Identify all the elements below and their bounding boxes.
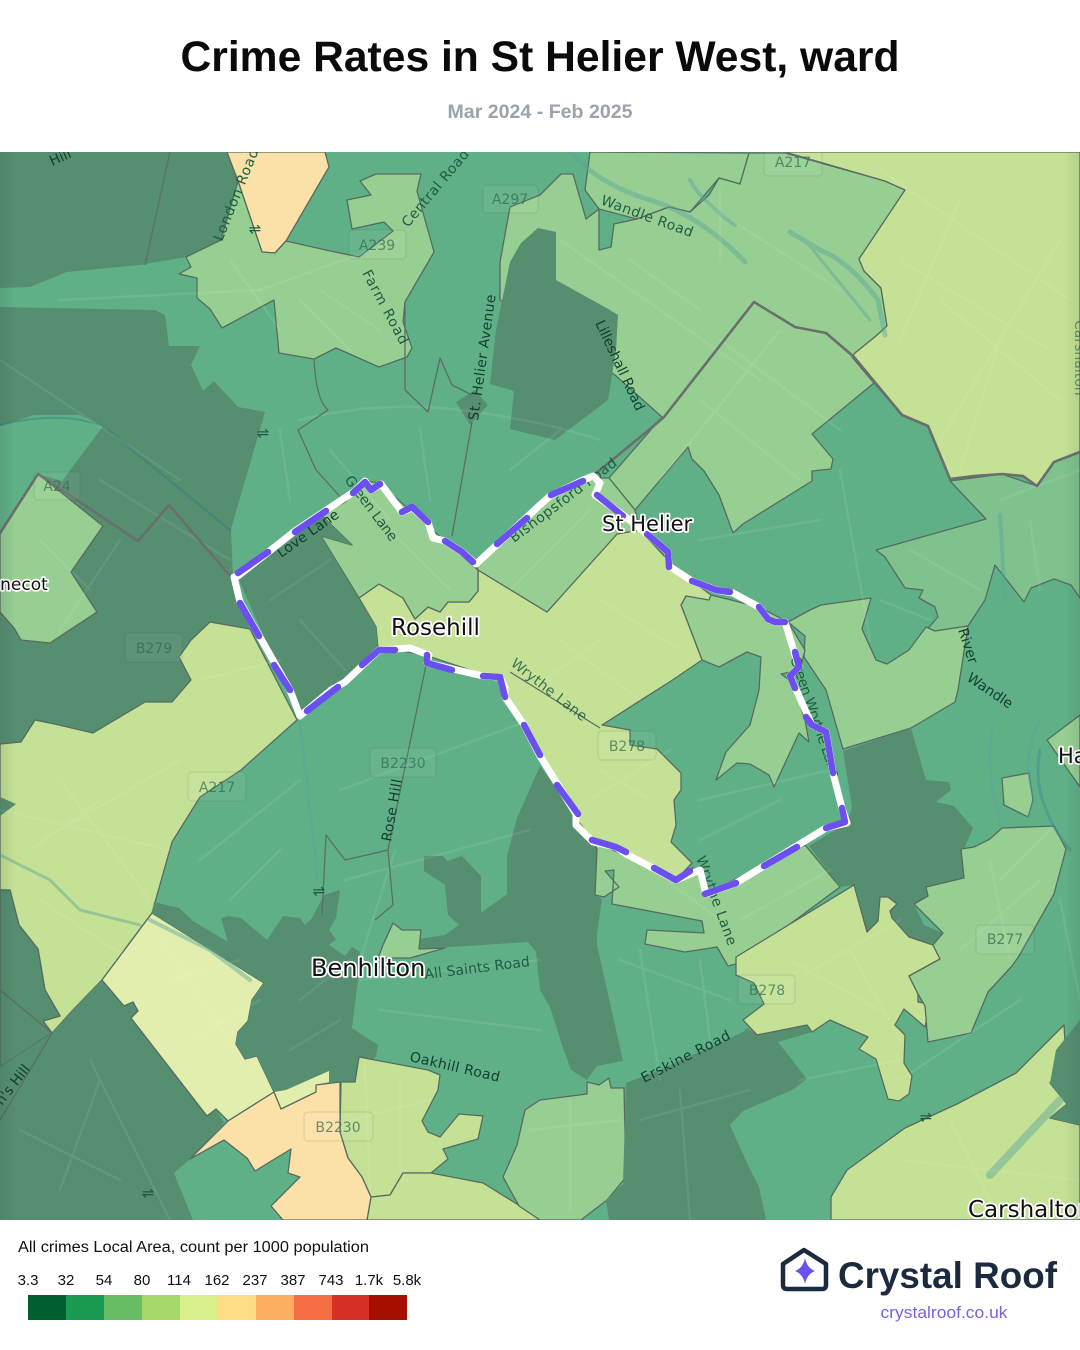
legend scale labels: 5.8k bbox=[393, 1272, 422, 1289]
road labels: St. Helier Avenue bbox=[466, 294, 500, 422]
legend title: All crimes Local Area, count per 1000 population bbox=[18, 1239, 369, 1256]
road labels: Hill bbox=[47, 146, 74, 170]
road labels: Wandle Road bbox=[599, 193, 695, 241]
road labels: Bishopsford Road bbox=[507, 455, 620, 546]
road labels: Green Wrythe Lane bbox=[786, 654, 843, 780]
road shields: B278 bbox=[609, 739, 645, 755]
legend scale labels bbox=[18, 1272, 422, 1289]
road labels: Rose Hill bbox=[379, 778, 406, 843]
rivers bbox=[0, 152, 1070, 1175]
road shields: B2230 bbox=[380, 756, 426, 772]
road shields: B277 bbox=[987, 932, 1023, 948]
road shields: A297 bbox=[492, 192, 528, 208]
legend bbox=[18, 1239, 422, 1320]
road shields bbox=[34, 150, 1034, 1141]
icon: house with star bbox=[783, 1250, 826, 1289]
map edge shading bbox=[0, 152, 1080, 1220]
title: Crime Rates in St Helier West, ward bbox=[180, 33, 900, 81]
road labels bbox=[0, 146, 1080, 1108]
road labels: Wrythe Lane bbox=[508, 656, 590, 725]
road labels: Wandle bbox=[964, 670, 1016, 712]
road shields: B279 bbox=[136, 641, 172, 657]
logo: Crystal Roof bbox=[783, 1250, 1058, 1322]
place labels: Rosehill bbox=[391, 615, 480, 641]
website link: crystalroof.co.uk bbox=[880, 1304, 1008, 1322]
stations: ⇌ bbox=[313, 882, 326, 900]
logo wordmark: Crystal Roof bbox=[838, 1255, 1058, 1296]
stations bbox=[142, 220, 933, 1202]
legend scale labels: 387 bbox=[280, 1272, 306, 1289]
road labels: Love Lane bbox=[274, 507, 342, 561]
road shields: A217 bbox=[199, 780, 235, 796]
road labels: River bbox=[954, 626, 981, 666]
road shields: B278 bbox=[749, 983, 785, 999]
legend scale labels: 162 bbox=[204, 1272, 230, 1289]
legend scale labels: 237 bbox=[242, 1272, 268, 1289]
road labels: Central Road bbox=[399, 147, 473, 231]
road labels: All Saints Road bbox=[424, 954, 531, 983]
road labels: Farm Road bbox=[358, 267, 411, 347]
legend scale labels: 114 bbox=[167, 1272, 191, 1289]
legend scale labels: 1.7k bbox=[355, 1272, 384, 1289]
road labels: Lilleshall Road bbox=[591, 318, 647, 414]
stations: ⇌ bbox=[142, 1184, 155, 1202]
stations: ⇌ bbox=[249, 220, 262, 238]
road labels: Green Lane bbox=[341, 473, 401, 545]
legend scale labels: 743 bbox=[318, 1272, 344, 1289]
choropleth map panel bbox=[0, 146, 1080, 1223]
stations: ⇌ bbox=[920, 1108, 933, 1126]
neighbourhood areas bbox=[0, 152, 1080, 1220]
legend colour ramp bbox=[28, 1295, 407, 1320]
road shields: A239 bbox=[359, 238, 395, 254]
street network bbox=[0, 170, 1080, 1220]
stations: ⇌ bbox=[257, 424, 270, 442]
road labels: Oakhill Road bbox=[408, 1049, 501, 1086]
heavy boundary lines bbox=[0, 302, 1080, 577]
place labels: St Helier bbox=[602, 512, 693, 536]
subtitle: date range: Mar 2024 - Feb 2025 bbox=[448, 102, 633, 123]
legend scale labels: 54 bbox=[96, 1272, 112, 1289]
legend scale labels: 3.3 bbox=[18, 1272, 38, 1289]
legend scale labels: 80 bbox=[134, 1272, 150, 1289]
place labels bbox=[0, 512, 1080, 1223]
road labels: Wrythe Lane bbox=[692, 854, 739, 948]
road labels: Erskine Road bbox=[639, 1028, 733, 1087]
place labels: Benhilton bbox=[311, 954, 425, 982]
road shields: B2230 bbox=[315, 1120, 361, 1136]
road shields: A217 bbox=[775, 155, 811, 171]
legend scale labels: 32 bbox=[58, 1272, 74, 1289]
ward boundary: St Helier West bbox=[234, 476, 847, 894]
major road lines bbox=[0, 152, 600, 1120]
road shields: A24 bbox=[43, 479, 71, 495]
road labels: London Road bbox=[211, 147, 262, 243]
